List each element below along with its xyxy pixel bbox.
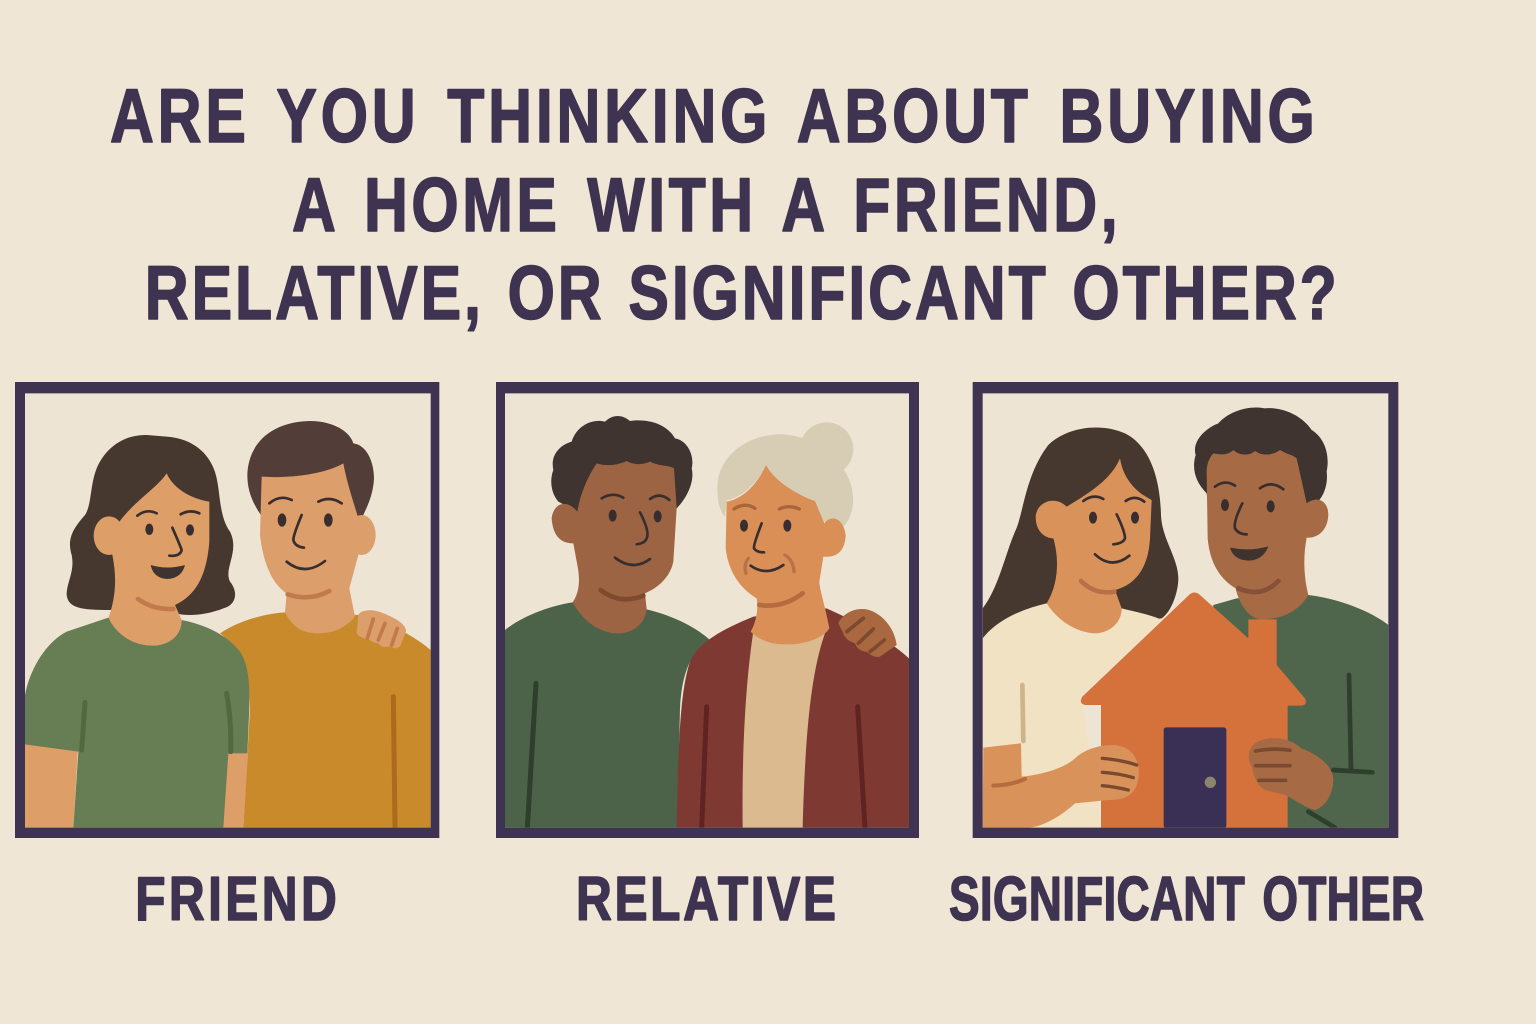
title: A HOME WITH A FRIEND, (292, 163, 1118, 248)
title (110, 74, 1337, 336)
panel: significant other (973, 382, 1398, 838)
man's hand (1249, 738, 1333, 810)
orange house (1081, 592, 1306, 828)
label: significant other: SIGNIFICANT OTHER (949, 864, 1424, 934)
title: ARE YOU THINKING ABOUT BUYING (110, 74, 1315, 159)
man in green sweater (505, 416, 710, 828)
hand on shoulder (357, 610, 406, 648)
panel: relative (496, 382, 919, 838)
frame (15, 382, 439, 838)
frame (973, 382, 1398, 838)
frame (496, 382, 919, 838)
woman's arm and hand (983, 743, 1139, 828)
woman in cream shirt (983, 427, 1178, 828)
man in yellow sweater (220, 421, 431, 828)
label: relative: RELATIVE (576, 864, 836, 933)
older woman in red cardigan (677, 422, 909, 828)
title: RELATIVE, OR SIGNIFICANT OTHER? (145, 251, 1337, 336)
hand on shoulder (838, 609, 897, 657)
man in green sweater (1194, 407, 1388, 828)
panel: friend (15, 382, 439, 838)
woman in green shirt (25, 435, 249, 828)
label: friend: FRIEND (135, 864, 337, 933)
